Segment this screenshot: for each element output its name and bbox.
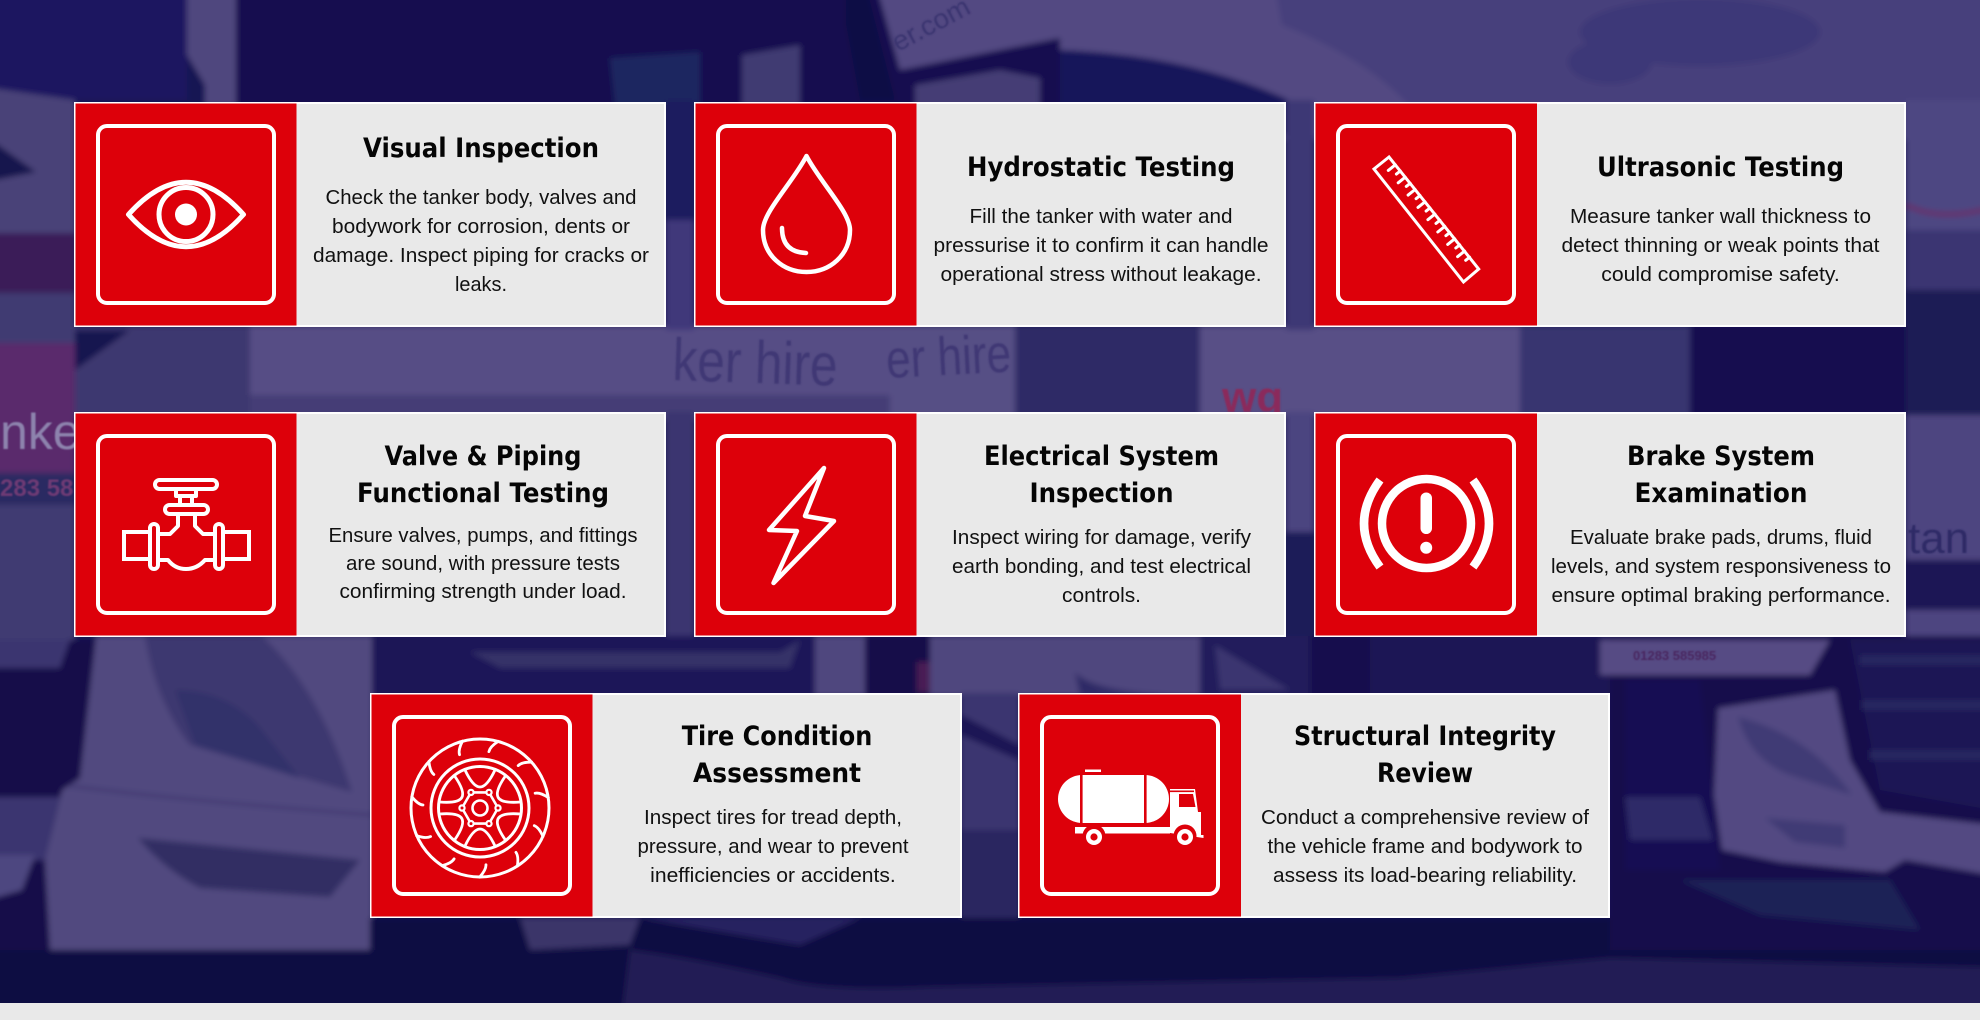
description	[934, 205, 1268, 286]
description: Evaluate brake pads, drums, fluid	[1570, 526, 1872, 549]
background truck lettering: wg	[1221, 373, 1283, 422]
card: Electrical System Inspection	[694, 412, 1286, 637]
card: Valve & Piping Functional Testing	[74, 412, 666, 637]
title: Visual Inspection	[363, 133, 599, 164]
description: earth bonding, and test electrical	[952, 555, 1251, 578]
icon frame	[1042, 717, 1218, 894]
description: operational stress without leakage.	[940, 263, 1262, 286]
sky	[1260, 0, 1980, 140]
description	[313, 186, 649, 296]
icon frame	[394, 717, 570, 894]
description	[1562, 205, 1880, 286]
gutters	[667, 102, 693, 218]
icon: eye	[128, 182, 244, 247]
description	[1261, 806, 1589, 887]
description: Inspect wiring for damage, verify	[952, 526, 1252, 549]
title: Review	[1377, 758, 1473, 789]
description: are sound, with pressure tests	[346, 552, 620, 575]
background truck lettering: tan	[1908, 514, 1969, 563]
left margin	[0, 86, 78, 236]
title	[1627, 441, 1815, 509]
description	[952, 526, 1252, 607]
card: Structural Integrity Review	[1018, 693, 1610, 918]
title	[1294, 721, 1556, 789]
title: Structural Integrity	[1294, 721, 1556, 752]
description: Inspect tires for tread depth,	[644, 806, 902, 829]
description: pressurise it to confirm it can handle	[934, 234, 1268, 257]
background truck lettering: ker hire	[672, 326, 839, 399]
title: Examination	[1634, 478, 1808, 509]
description: pressure, and wear to prevent	[638, 835, 909, 858]
red icon panel	[696, 414, 916, 636]
title	[357, 441, 609, 509]
card: Brake System Examination	[1314, 412, 1906, 637]
card: Hydrostatic Testing	[694, 102, 1286, 327]
description: controls.	[1062, 584, 1141, 607]
background truck lettering	[0, 0, 1969, 663]
icon frame	[718, 126, 894, 303]
description: Fill the tanker with water and	[970, 205, 1232, 228]
red icon panel	[1316, 414, 1537, 636]
red icon panel	[696, 104, 916, 326]
background truck lettering: 283 58	[0, 475, 73, 502]
icon frame	[98, 126, 274, 303]
card: Tire Condition Assessment	[370, 693, 962, 918]
description: inefficiencies or accidents.	[650, 864, 896, 887]
description: could compromise safety.	[1601, 263, 1840, 286]
description: Measure tanker wall thickness to	[1570, 205, 1871, 228]
title: Assessment	[693, 758, 861, 789]
row gap 2	[370, 636, 430, 696]
description: Check the tanker body, valves and	[326, 186, 636, 209]
title: Hydrostatic Testing	[967, 152, 1235, 183]
right lower truck	[1610, 634, 1980, 950]
description: the vehicle frame and bodywork to	[1268, 835, 1582, 858]
description	[1551, 526, 1891, 607]
description: levels, and system responsiveness to	[1551, 555, 1891, 578]
icon: water drop	[763, 156, 850, 272]
title: Tire Condition	[682, 721, 872, 752]
icon: tire and wheel	[411, 739, 549, 877]
second cab roof	[876, 0, 1403, 104]
gap between row 3 cards	[962, 696, 1018, 832]
right margin	[1906, 136, 1980, 232]
title	[682, 721, 872, 789]
icon: lightning bolt	[769, 468, 834, 583]
title: Ultrasonic Testing	[1597, 152, 1844, 183]
description: bodywork for corrosion, dents or	[332, 215, 630, 238]
description: ensure optimal braking performance.	[1552, 584, 1890, 607]
description: Conduct a comprehensive review of	[1261, 806, 1589, 829]
description	[328, 524, 638, 603]
icon frame	[718, 436, 894, 613]
description: confirming strength under load.	[340, 580, 626, 603]
title: Valve & Piping	[384, 441, 582, 472]
background truck lettering: nker	[0, 404, 97, 460]
title: Electrical System	[984, 441, 1219, 472]
red icon panel	[1316, 104, 1537, 326]
description: assess its load-bearing reliability.	[1273, 864, 1577, 887]
red icon panel	[1020, 694, 1241, 916]
background truck lettering: 01283 585985	[1633, 648, 1716, 663]
card: Ultrasonic Testing	[1314, 102, 1906, 327]
description	[638, 806, 909, 887]
icon: brake warning	[1364, 479, 1489, 568]
description: detect thinning or weak points that	[1562, 234, 1880, 257]
title: Inspection	[1030, 478, 1174, 509]
icon: ruler	[1374, 157, 1479, 282]
title: Functional Testing	[357, 478, 609, 509]
description: leaks.	[455, 273, 507, 296]
card: Visual Inspection	[74, 102, 666, 327]
left truck body	[0, 640, 92, 954]
title: Brake System	[1627, 441, 1815, 472]
title	[984, 441, 1219, 509]
red icon panel	[76, 414, 296, 636]
bottom strip	[0, 1003, 1980, 1020]
description: Ensure valves, pumps, and fittings	[328, 524, 638, 547]
icon: tanker truck	[1058, 770, 1204, 848]
ground and wheels	[0, 950, 1980, 1003]
icon frame	[1338, 436, 1514, 613]
background truck lettering: er hire	[884, 324, 1012, 390]
red icon panel	[76, 104, 296, 326]
red icon panel	[372, 694, 592, 916]
icon frame	[98, 436, 274, 613]
description: damage. Inspect piping for cracks or	[313, 244, 649, 267]
icon: valve	[124, 480, 249, 569]
first cab	[0, 0, 187, 100]
row gap 1	[75, 326, 250, 416]
icon frame	[1338, 126, 1514, 303]
